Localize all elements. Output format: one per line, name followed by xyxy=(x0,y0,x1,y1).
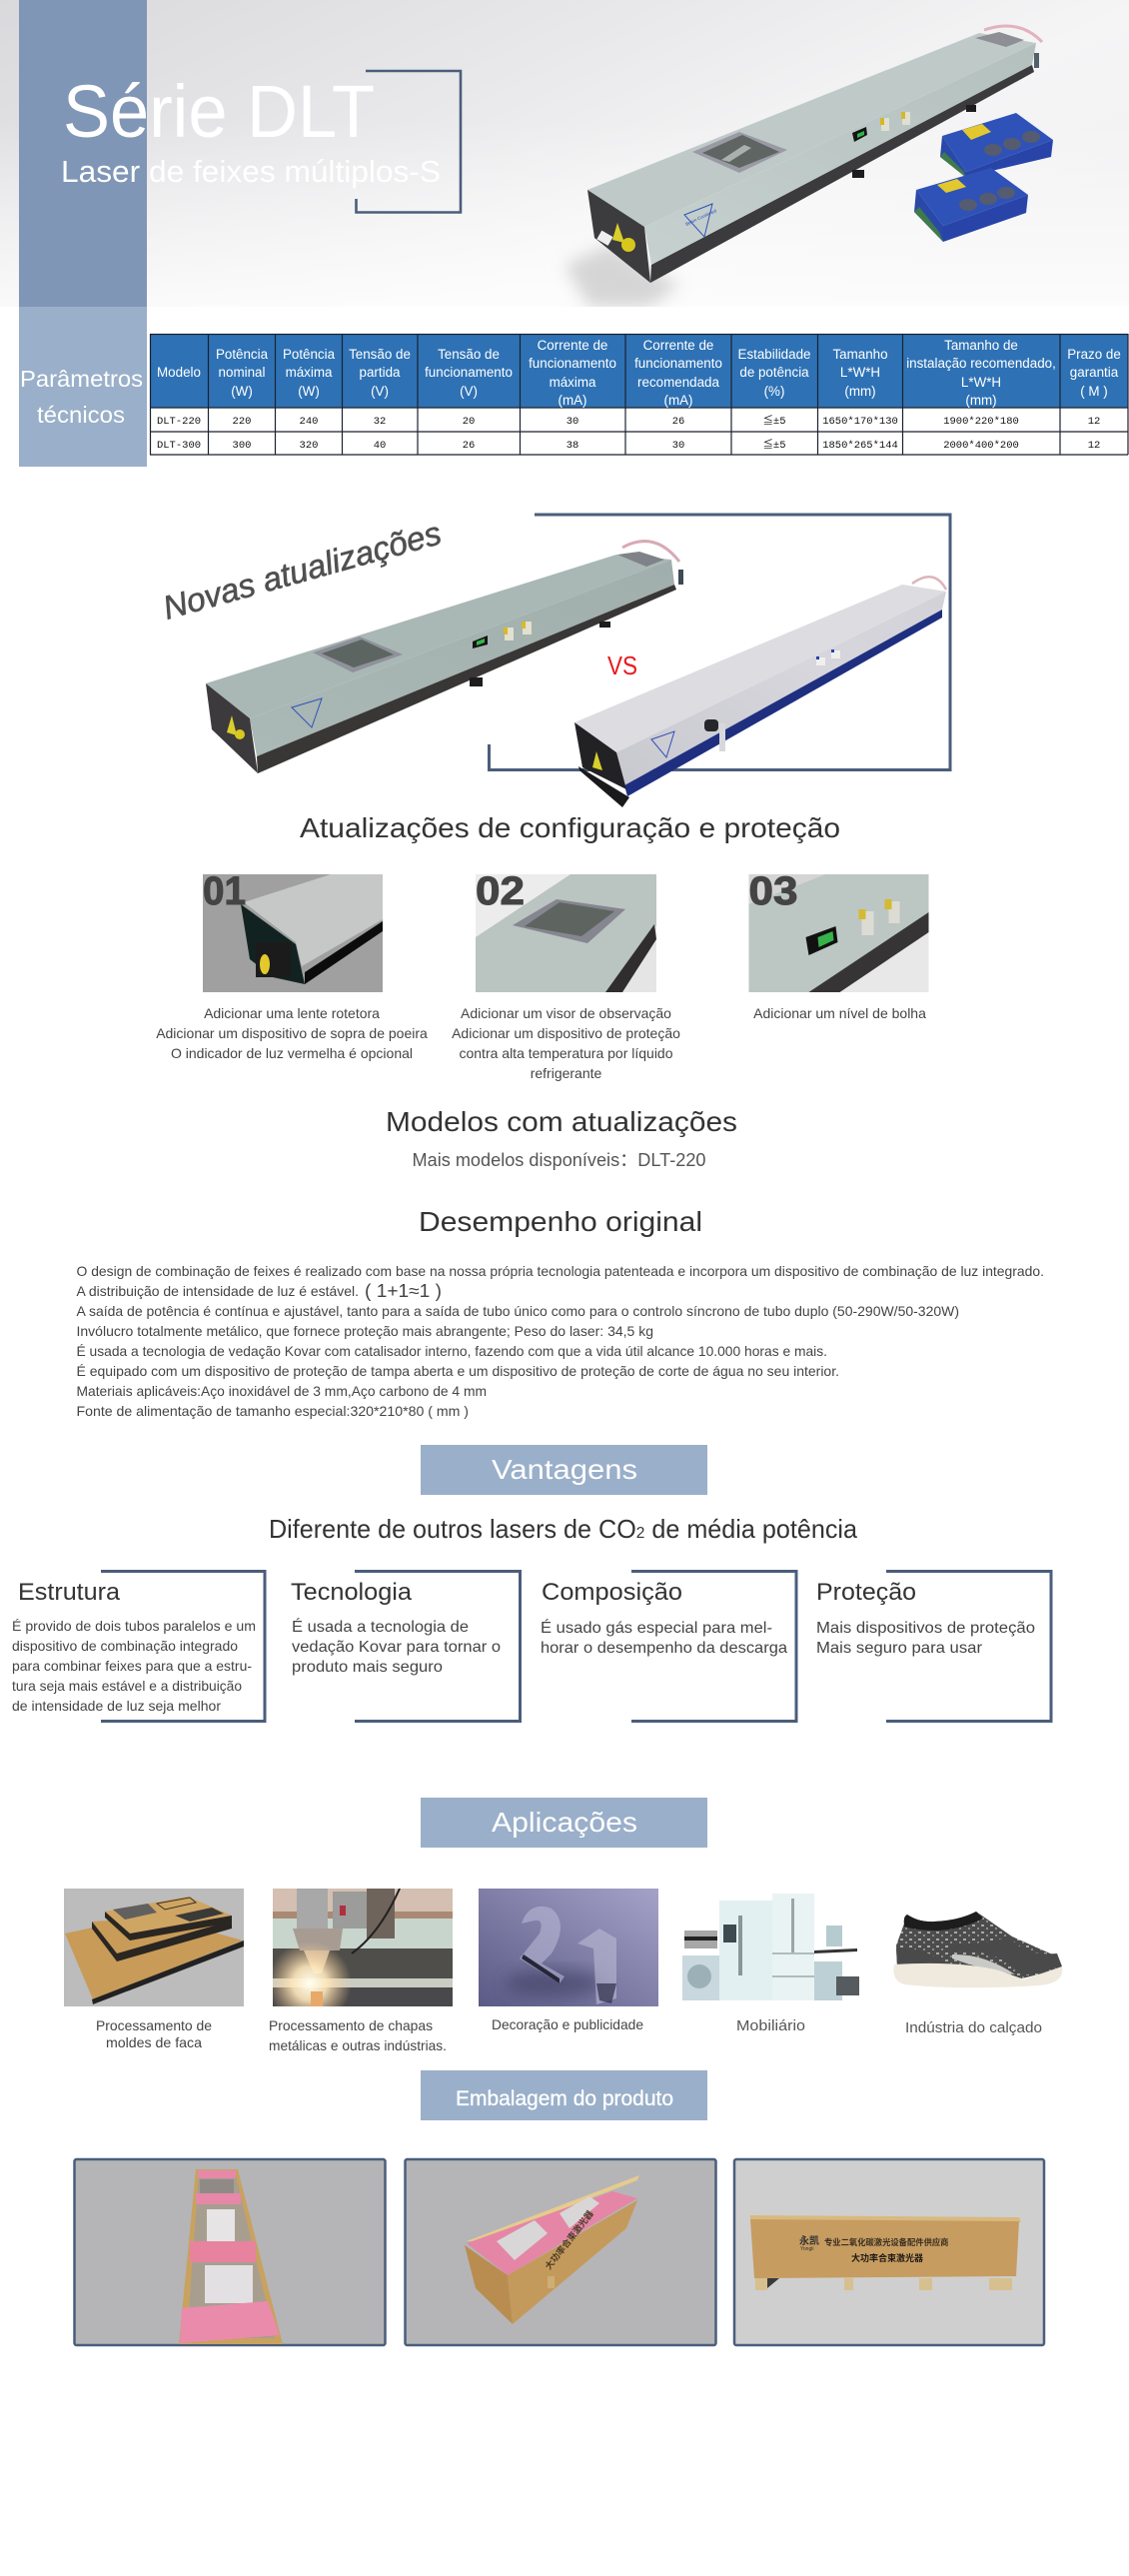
specifications table: DLT-300 xyxy=(157,440,201,452)
specifications table: nominal xyxy=(219,365,265,380)
specifications table: 1900*220*180 xyxy=(943,416,1019,428)
specifications table: Corrente de xyxy=(538,338,607,353)
panel: packaging photo closed wooden crate: Yongli xyxy=(800,2246,813,2252)
text block: performance list: A saída de potência é contínua e ajustável, tanto para a saída de tubo único como para o controlo síncrono de tubo duplo (50-290W/50-320W) xyxy=(76,1303,959,1319)
specifications table: (W) xyxy=(231,384,253,399)
text block: performance list: ( 1+1≈1 ) xyxy=(365,1281,442,1301)
banner: product packaging: Embalagem do produto xyxy=(456,2087,673,2110)
banner: product packaging xyxy=(421,2070,707,2120)
specifications table: (W) xyxy=(298,384,320,399)
card: protection xyxy=(816,1571,1051,1721)
card: structure: para combinar feixes para que a estru- xyxy=(12,1658,252,1674)
text block: performance list xyxy=(76,1263,1044,1419)
specifications table: ≦±5 xyxy=(762,414,786,428)
caption: Decoração e publicidade xyxy=(492,2016,643,2032)
caption 02 xyxy=(452,1005,680,1081)
heading: original performance: Desempenho original xyxy=(419,1206,702,1237)
card: technology xyxy=(291,1571,520,1721)
specifications table: recomendada xyxy=(637,375,719,390)
panel: packaging photo closed wooden crate: 永凯 xyxy=(799,2234,819,2247)
panel: hero banner xyxy=(0,0,1129,307)
specifications table: (V) xyxy=(371,384,389,399)
image: home appliances xyxy=(682,1894,859,2000)
image: lower power supply xyxy=(914,168,1028,242)
text block: performance list: Fonte de alimentação de tamanho especial:320*210*80 ( mm ) xyxy=(76,1403,469,1419)
specifications table: Estabilidade xyxy=(738,347,810,362)
card: structure: É provido de dois tubos paralelos e um xyxy=(12,1618,256,1634)
card: composition: horar o desempenho da descarga xyxy=(541,1640,787,1657)
application: furniture and appliances xyxy=(682,1894,859,2034)
image: upper power supply xyxy=(940,113,1053,177)
specifications table: Corrente de xyxy=(643,338,713,353)
caption 01: Adicionar um dispositivo de sopra de poeira xyxy=(156,1025,428,1041)
banner: advantages: Vantagens xyxy=(492,1454,637,1485)
application: sheet metal xyxy=(268,1889,453,2053)
parameters side label xyxy=(19,307,147,467)
application: footwear xyxy=(893,1912,1062,2036)
specifications table: 30 xyxy=(672,440,684,452)
card: composition: Composição xyxy=(542,1579,682,1606)
card: structure xyxy=(12,1571,265,1721)
specifications table: (mA) xyxy=(663,393,693,408)
caption xyxy=(269,2017,447,2053)
specifications table: DLT-220 xyxy=(157,416,201,428)
specifications table: ≦±5 xyxy=(762,438,786,452)
card: composition: É usado gás especial para mel- xyxy=(541,1618,772,1637)
heading: configuration and protection upgrades: Atualizações de configuração e proteção xyxy=(300,812,840,843)
specifications table: 40 xyxy=(374,440,386,452)
specifications table: 30 xyxy=(566,416,578,428)
specifications table: 1650*170*130 xyxy=(822,416,898,428)
specifications table: (mm) xyxy=(844,384,876,399)
card: technology: vedação Kovar para tornar o xyxy=(292,1639,501,1656)
image: bubble level xyxy=(749,874,929,992)
caption 02: contra alta temperatura por líquido xyxy=(459,1045,673,1061)
number 01: 01 xyxy=(203,869,246,913)
caption: moldes de faca xyxy=(106,2034,202,2050)
specifications table: 2000*400*200 xyxy=(943,440,1019,452)
number 02: 02 xyxy=(476,869,525,913)
panel: packaging photo closed wooden crate xyxy=(734,2159,1044,2345)
specifications table: Potência xyxy=(216,347,269,362)
text block: performance list: É equipado com um dispositivo de proteção de tampa aberta e um dispositivo de proteção de corte de água no seu interior. xyxy=(76,1363,839,1379)
image: upgraded green laser tube xyxy=(206,542,683,773)
specifications table: 320 xyxy=(300,440,318,452)
text block: performance list: Materiais aplicáveis:Aço inoxidável de 3 mm,Aço carbono de 4 mm xyxy=(76,1383,487,1399)
caption 03: Adicionar um nível de bolha xyxy=(753,1005,926,1021)
specifications table: de potência xyxy=(739,365,809,380)
specifications table: instalação recomendado, xyxy=(906,356,1056,371)
application: decoration xyxy=(479,1889,658,2032)
specifications table: 20 xyxy=(463,416,475,428)
caption: Mobiliário xyxy=(736,2017,805,2034)
card: technology: Tecnologia xyxy=(291,1579,413,1606)
specifications table: 26 xyxy=(463,440,475,452)
number 03: 03 xyxy=(749,869,797,913)
image: acrylic numerals xyxy=(479,1889,658,2006)
subtitle: Laser de feixes múltiplos-S xyxy=(61,154,441,189)
specifications table: funcionamento xyxy=(634,356,722,371)
specifications table: partida xyxy=(360,365,401,380)
application: die board processing xyxy=(64,1889,244,2050)
specifications table: funcionamento xyxy=(425,365,513,380)
specifications table: máxima xyxy=(286,365,333,380)
heading: new upgrades: Novas atualizações xyxy=(159,514,445,627)
panel: upgrade 02 xyxy=(452,869,680,1081)
text block: performance list: O design de combinação de feixes é realizado com base na nossa própria tecnologia patenteada e incorpora um dispositivo de combinação de luz integrado. xyxy=(76,1263,1044,1279)
specifications table: Tamanho xyxy=(832,347,888,362)
comparison bracket xyxy=(490,515,950,769)
VS label: VS xyxy=(607,650,637,680)
caption: Processamento de xyxy=(96,2017,212,2033)
caption: Indústria do calçado xyxy=(905,2019,1042,2036)
panel: packaging photo open box angled: 大功率合束激光器 xyxy=(543,2208,595,2271)
specifications table: (%) xyxy=(764,384,784,399)
title bracket xyxy=(356,71,461,212)
panel: packaging photo closed wooden crate: 大功率合束激光器 xyxy=(851,2252,923,2263)
specifications table: 220 xyxy=(233,416,251,428)
specifications table: L*W*H xyxy=(961,375,1001,390)
image: previous white laser tube xyxy=(574,577,946,807)
card: structure: de intensidade de luz seja melhor xyxy=(12,1698,221,1714)
panel: packaging photo closed wooden crate: 专业二氧化碳激光设备配件供应商 xyxy=(824,2237,948,2247)
parameters side label: técnicos xyxy=(37,402,125,428)
specifications table: garantia xyxy=(1070,365,1119,380)
text: available models: Mais modelos disponíveis：DLT-220 xyxy=(412,1150,705,1170)
caption 01: O indicador de luz vermelha é opcional xyxy=(171,1045,413,1061)
caption 01 xyxy=(156,1005,428,1061)
text block: performance list: A distribuição de intensidade de luz é estável. xyxy=(76,1283,359,1299)
card: structure: tura seja mais estável e a distribuição xyxy=(12,1678,242,1694)
specifications table: 26 xyxy=(672,416,684,428)
specifications table: (mA) xyxy=(558,393,587,408)
panel: new upgrades comparison xyxy=(159,514,950,807)
image: wooden die boards xyxy=(64,1889,244,2006)
specifications table: Prazo de xyxy=(1067,347,1121,362)
card: structure: dispositivo de combinação integrado xyxy=(12,1638,238,1654)
heading: different from other CO2 lasers: Diferente de outros lasers de CO2 de média potência xyxy=(269,1514,858,1544)
specifications table: L*W*H xyxy=(840,365,880,380)
parameters side label: Parâmetros xyxy=(20,366,143,392)
specifications table: (mm) xyxy=(965,393,997,408)
specifications table: 1850*265*144 xyxy=(822,440,898,452)
caption: metálicas e outras indústrias. xyxy=(269,2037,447,2053)
specifications table: funcionamento xyxy=(529,356,616,371)
card: technology: produto mais seguro xyxy=(292,1659,443,1676)
card: composition xyxy=(541,1571,796,1721)
panel: upgrade 03 xyxy=(749,869,929,1021)
specifications table: Potência xyxy=(283,347,336,362)
image: laser tube with green housing xyxy=(587,26,1042,283)
specifications table: máxima xyxy=(550,375,596,390)
image: sneaker xyxy=(893,1912,1062,1987)
specifications table: 32 xyxy=(374,416,386,428)
text block: performance list: É usada a tecnologia de vedação Kovar com catalisador interno, fazendo com que a vida útil alcance 10.000 horas e mais. xyxy=(76,1343,827,1359)
card: protection: Mais dispositivos de proteção xyxy=(816,1620,1035,1637)
specifications table xyxy=(150,334,1128,455)
image: rotating lens xyxy=(203,874,383,992)
title: Série DLT xyxy=(63,70,375,153)
specifications table: Tensão de xyxy=(349,347,411,362)
specifications table: Modelo xyxy=(157,365,201,380)
hero background xyxy=(0,0,1129,307)
caption 01: Adicionar uma lente rotetora xyxy=(204,1005,380,1021)
card: protection: Mais seguro para usar xyxy=(816,1640,983,1657)
specifications table: ( M ) xyxy=(1080,384,1108,399)
image: laser cutting head xyxy=(273,1889,453,2006)
specifications table: 38 xyxy=(566,440,578,452)
caption 02: Adicionar um dispositivo de proteção xyxy=(452,1025,680,1041)
specifications table: (V) xyxy=(460,384,478,399)
panel: packaging photo open box angled xyxy=(406,2159,715,2345)
specifications table: 12 xyxy=(1088,440,1100,452)
hero floor shadow xyxy=(564,245,679,307)
banner: applications: Aplicações xyxy=(492,1807,637,1838)
banner: advantages xyxy=(421,1445,707,1495)
panel: technical parameters xyxy=(19,307,1128,467)
banner: applications xyxy=(421,1798,707,1848)
card: technology: É usada a tecnologia de xyxy=(292,1617,469,1636)
image: observation window xyxy=(476,874,656,992)
text block: performance list: Invólucro totalmente metálico, que fornece proteção mais abrangente; Peso do laser: 34,5 kg xyxy=(76,1323,653,1339)
card: protection: Proteção xyxy=(816,1579,916,1606)
panel: upgrade 01 xyxy=(156,869,428,1061)
heading: upgraded models: Modelos com atualizações xyxy=(386,1106,737,1137)
specifications table: Tensão de xyxy=(438,347,500,362)
caption 02: Adicionar um visor de observação xyxy=(461,1005,671,1021)
panel: packaging photo open box top view xyxy=(74,2159,386,2345)
image: laser tube with green housing: Beam Combined xyxy=(684,208,717,227)
caption: Processamento de chapas xyxy=(269,2017,433,2033)
specifications table: 12 xyxy=(1088,416,1100,428)
specifications table: 300 xyxy=(233,440,251,452)
specifications table: Tamanho de xyxy=(944,338,1018,353)
caption xyxy=(96,2017,212,2050)
caption 02: refrigerante xyxy=(531,1065,602,1081)
card: structure: Estrutura xyxy=(18,1579,121,1606)
blue side panel xyxy=(19,0,147,307)
specifications table: 240 xyxy=(300,416,318,428)
